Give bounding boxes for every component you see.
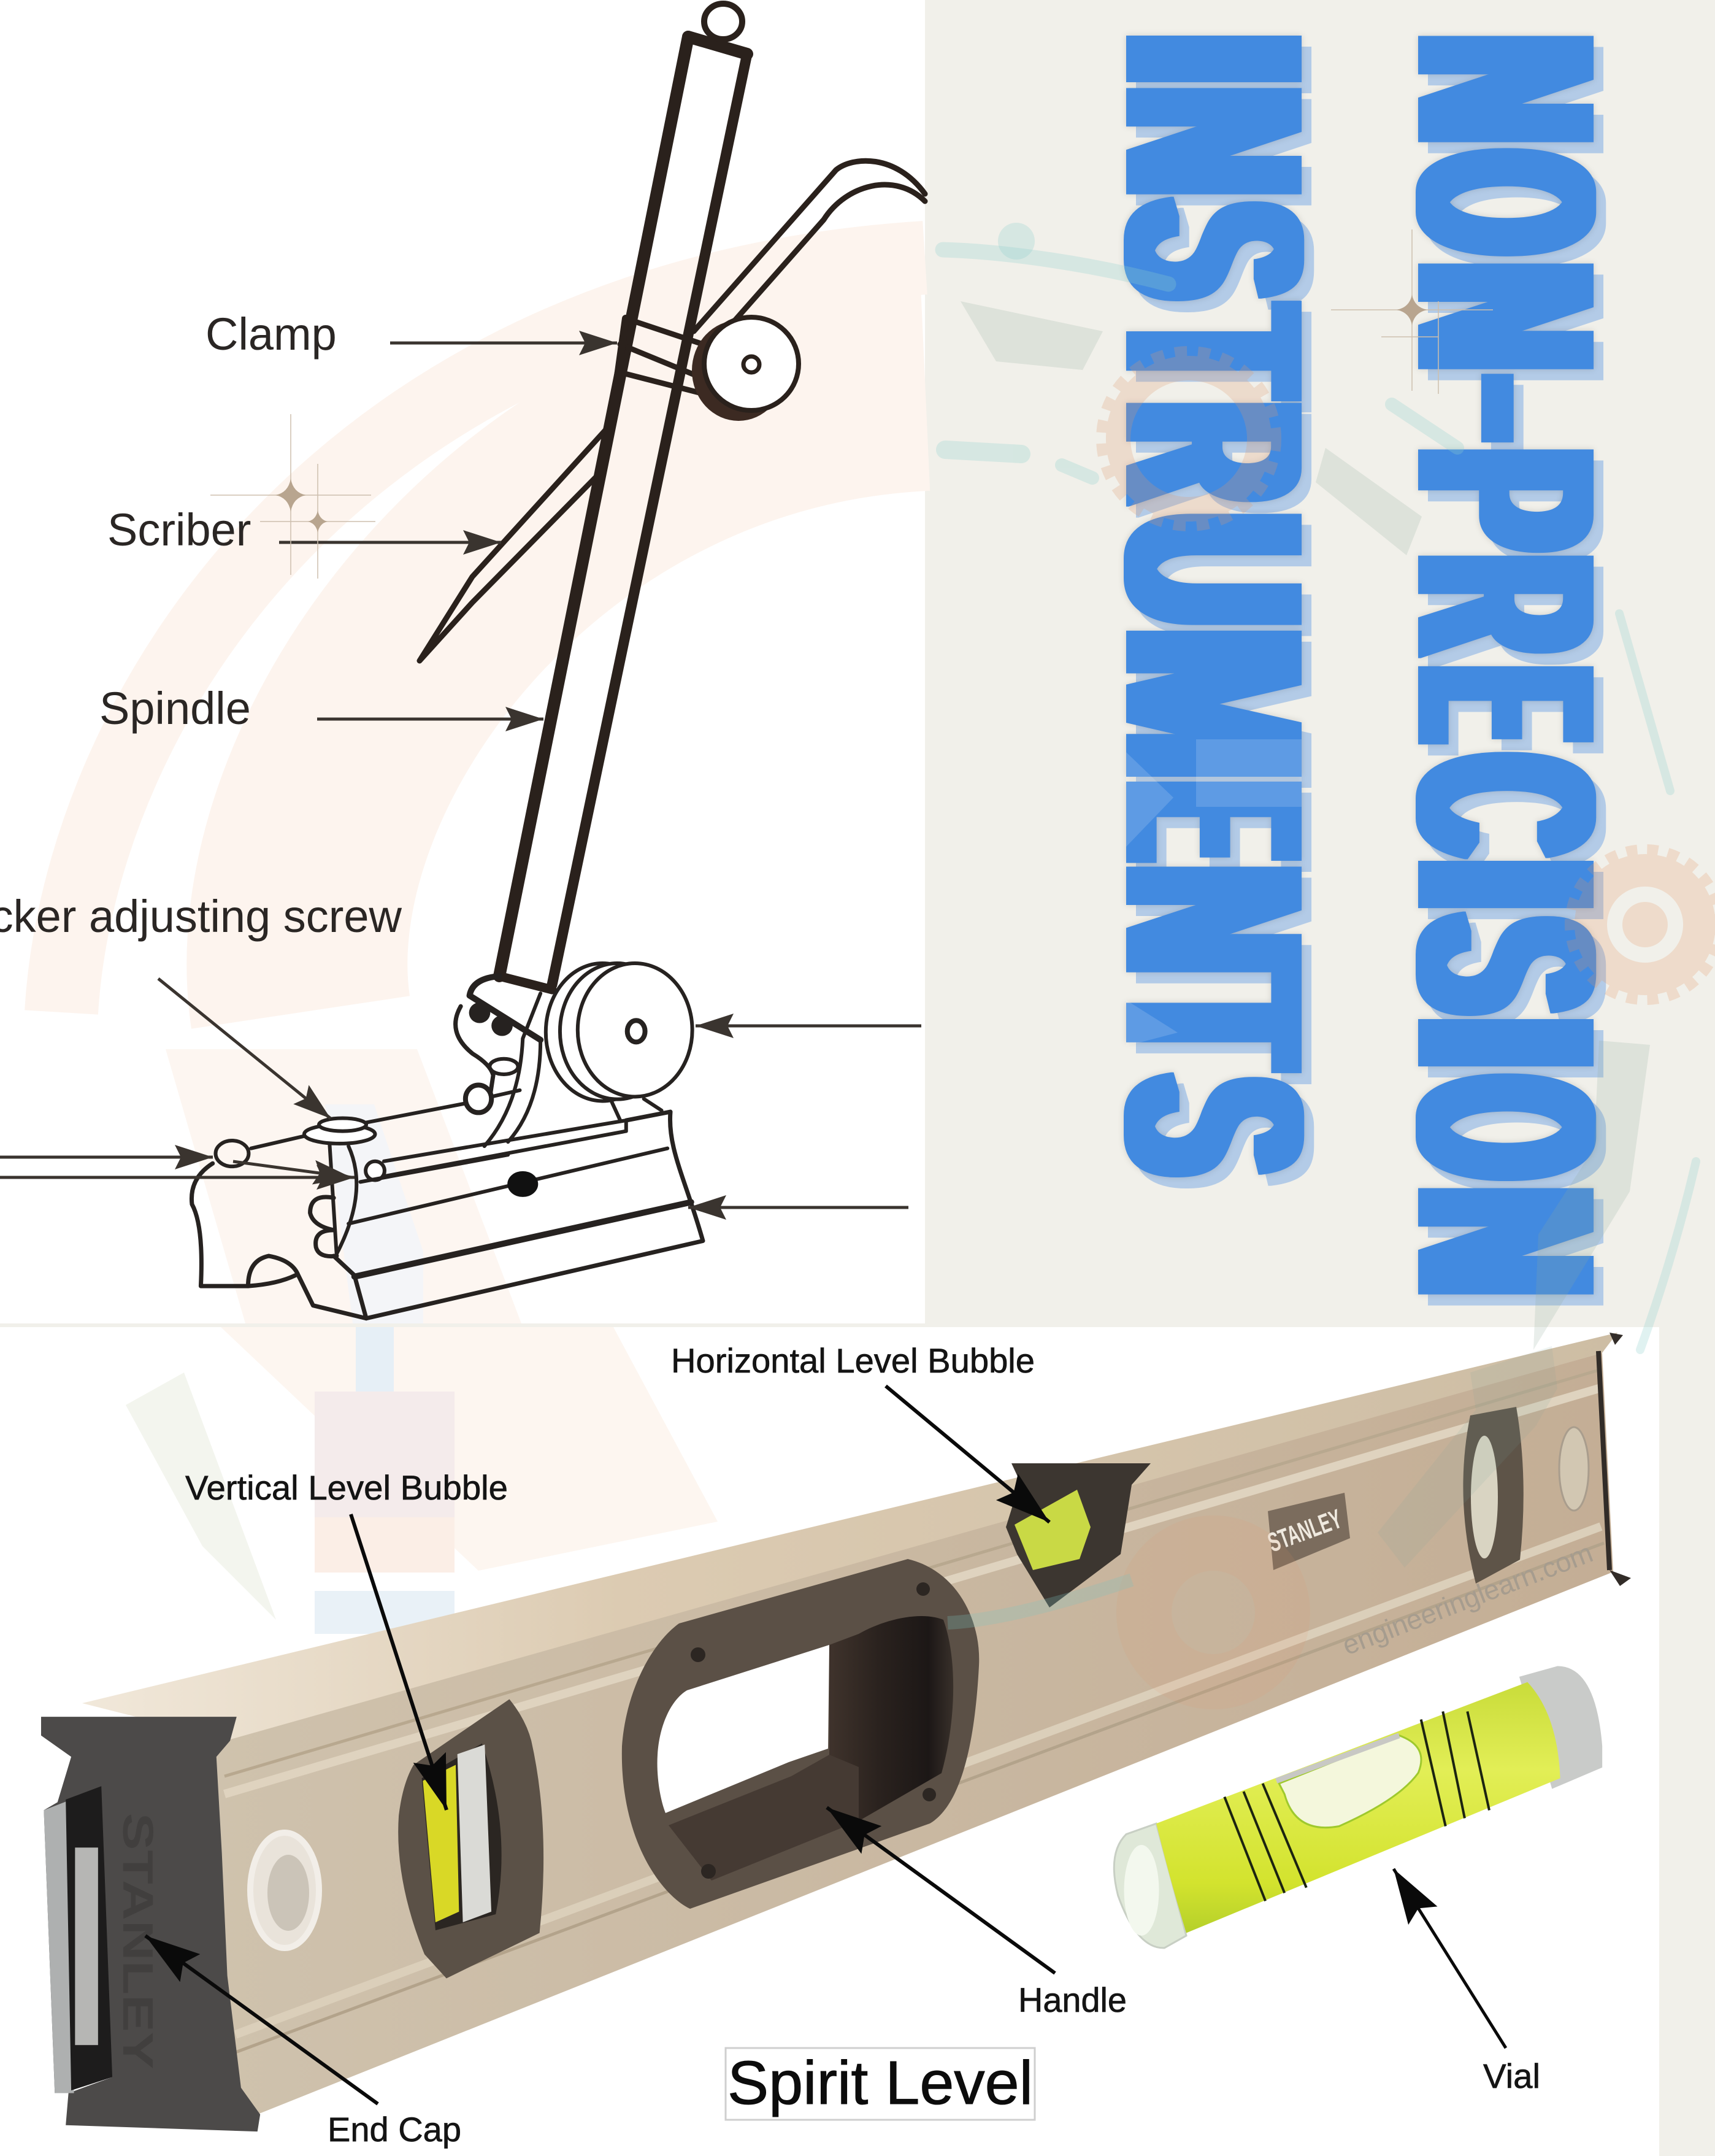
label: Clamp: Clamp (205, 309, 337, 360)
vial liquid (1156, 1682, 1560, 1933)
heading: NON-PRECISION: O (1366, 153, 1647, 252)
diagram arrows (0, 343, 921, 1207)
vial grey right end (1519, 1666, 1602, 1789)
watermark: grey green shapes (961, 301, 1650, 1350)
diagram labels (0, 309, 402, 942)
watermark: gear left (1102, 352, 1276, 526)
spirit level (41, 1333, 1631, 2131)
level right end (1598, 1333, 1631, 1586)
right bubble holder (1463, 1407, 1589, 1584)
panel: marking gauge diagram (0, 0, 925, 1323)
horizontal bubble holder (1006, 1463, 1151, 1607)
stanley badge: STANLEY (1264, 1504, 1346, 1558)
heading: INSTRUMENTS (1073, 33, 1356, 1173)
watermark url: engineeringlearn.com (1338, 1537, 1597, 1661)
clamp wheel (692, 320, 785, 421)
icon: sparkles on diagram (210, 414, 375, 579)
spindle rod (499, 4, 747, 990)
label: Handle: Handle (1018, 1981, 1127, 2019)
label: Vial: Vial (1483, 2057, 1540, 2095)
base body (191, 1112, 703, 1319)
diagram: marking gauge (420, 4, 925, 990)
vial left glass end (1114, 1823, 1186, 1948)
heading: NON-PRECISION: R (1365, 556, 1646, 651)
large wheel (546, 963, 693, 1120)
heading: INSTRUMENTS: R (1073, 404, 1354, 499)
watermark: gear right (1570, 850, 1715, 999)
watermark: pale shapes behind level (126, 1327, 718, 1634)
left bubble holder (398, 1699, 543, 1978)
clamp (617, 161, 925, 421)
watermark: teal strokes (943, 250, 1696, 1350)
level top face (82, 1333, 1617, 1741)
heading: NON-PRECISION: C (1366, 756, 1648, 853)
cap emboss text: STANLEY (114, 1813, 162, 2069)
heading: NON-PRECISION: P (1365, 449, 1646, 548)
heading: INSTRUMENTS: E (1073, 784, 1354, 858)
curved arm (694, 161, 925, 331)
label: rocker adjusting screw: cker adjusting screw (0, 891, 402, 942)
heading: NON-PRECISION (1365, 36, 1659, 1295)
rivet (250, 1833, 319, 1948)
label: Vertical Level Bubble: Vertical Level Bubble (185, 1468, 508, 1507)
vial (1114, 1666, 1602, 1948)
heading: NON-PRECISION: I (1365, 858, 1646, 911)
vial marks (1224, 1711, 1489, 1901)
heading: NON-PRECISION: N (1365, 1188, 1646, 1295)
label: Scriber: Scriber (107, 504, 251, 555)
scriber (420, 430, 605, 661)
stanley badge (1264, 1493, 1350, 1570)
heading: INSTRUMENTS: I (1074, 33, 1355, 85)
label: Horizontal Level Bubble: Horizontal Level Bubble (671, 1341, 1035, 1380)
heading: INSTRUMENTS: T (1073, 309, 1354, 393)
end cap (41, 1717, 260, 2131)
heading: NON-PRECISION: I (1365, 1016, 1646, 1069)
handle opening (658, 1645, 829, 1813)
heading: NON-PRECISION: E (1365, 669, 1647, 739)
watermark: lower orange and blue blocks (166, 1049, 521, 1323)
heading: NON-PRECISION: N (1365, 264, 1646, 369)
heading: NON-PRECISION: - (1378, 376, 1659, 441)
level front face (209, 1353, 1613, 2123)
rocker adjusting screw (215, 1103, 467, 1256)
diagram: base assembly (191, 963, 703, 1319)
heading: NON-PRECISION: O (1366, 1078, 1647, 1177)
label: End Cap: End Cap (328, 2110, 461, 2149)
handle grip (669, 1755, 859, 1881)
label: Spindle: Spindle (99, 683, 251, 734)
heading: INSTRUMENTS: U (1074, 514, 1355, 625)
title: rotated heading (1073, 33, 1659, 1295)
heading: INSTRUMENTS: S (1074, 1078, 1356, 1173)
icon: sparkles on title (1331, 229, 1493, 394)
heading: NON-PRECISION: S (1366, 917, 1647, 1012)
heading: NON-PRECISION: N (1365, 36, 1646, 142)
watermark overlay on right column (943, 223, 1715, 1350)
handle (622, 1559, 979, 1909)
level arrows (145, 1386, 1506, 2104)
watermark tints on level (948, 1346, 1557, 1709)
watermark: light facets on title (1126, 739, 1302, 1046)
knuckle and pivot (456, 976, 540, 1146)
heading: INSTRUMENTS: N (1073, 88, 1354, 194)
watermark: orange arcs (61, 258, 925, 1012)
level labels (185, 1341, 1540, 2149)
heading: INSTRUMENTS: S (1074, 202, 1355, 297)
panel: spirit level photo (0, 1327, 1659, 2156)
level grooves (224, 1369, 1604, 2052)
heading: INSTRUMENTS: T (1073, 980, 1354, 1065)
heading: INSTRUMENTS: M (1074, 628, 1355, 779)
heading: INSTRUMENTS: N (1073, 866, 1354, 972)
vial bubble (1279, 1736, 1421, 1828)
caption: Spirit Level: Spirit Level (727, 2049, 1033, 2117)
